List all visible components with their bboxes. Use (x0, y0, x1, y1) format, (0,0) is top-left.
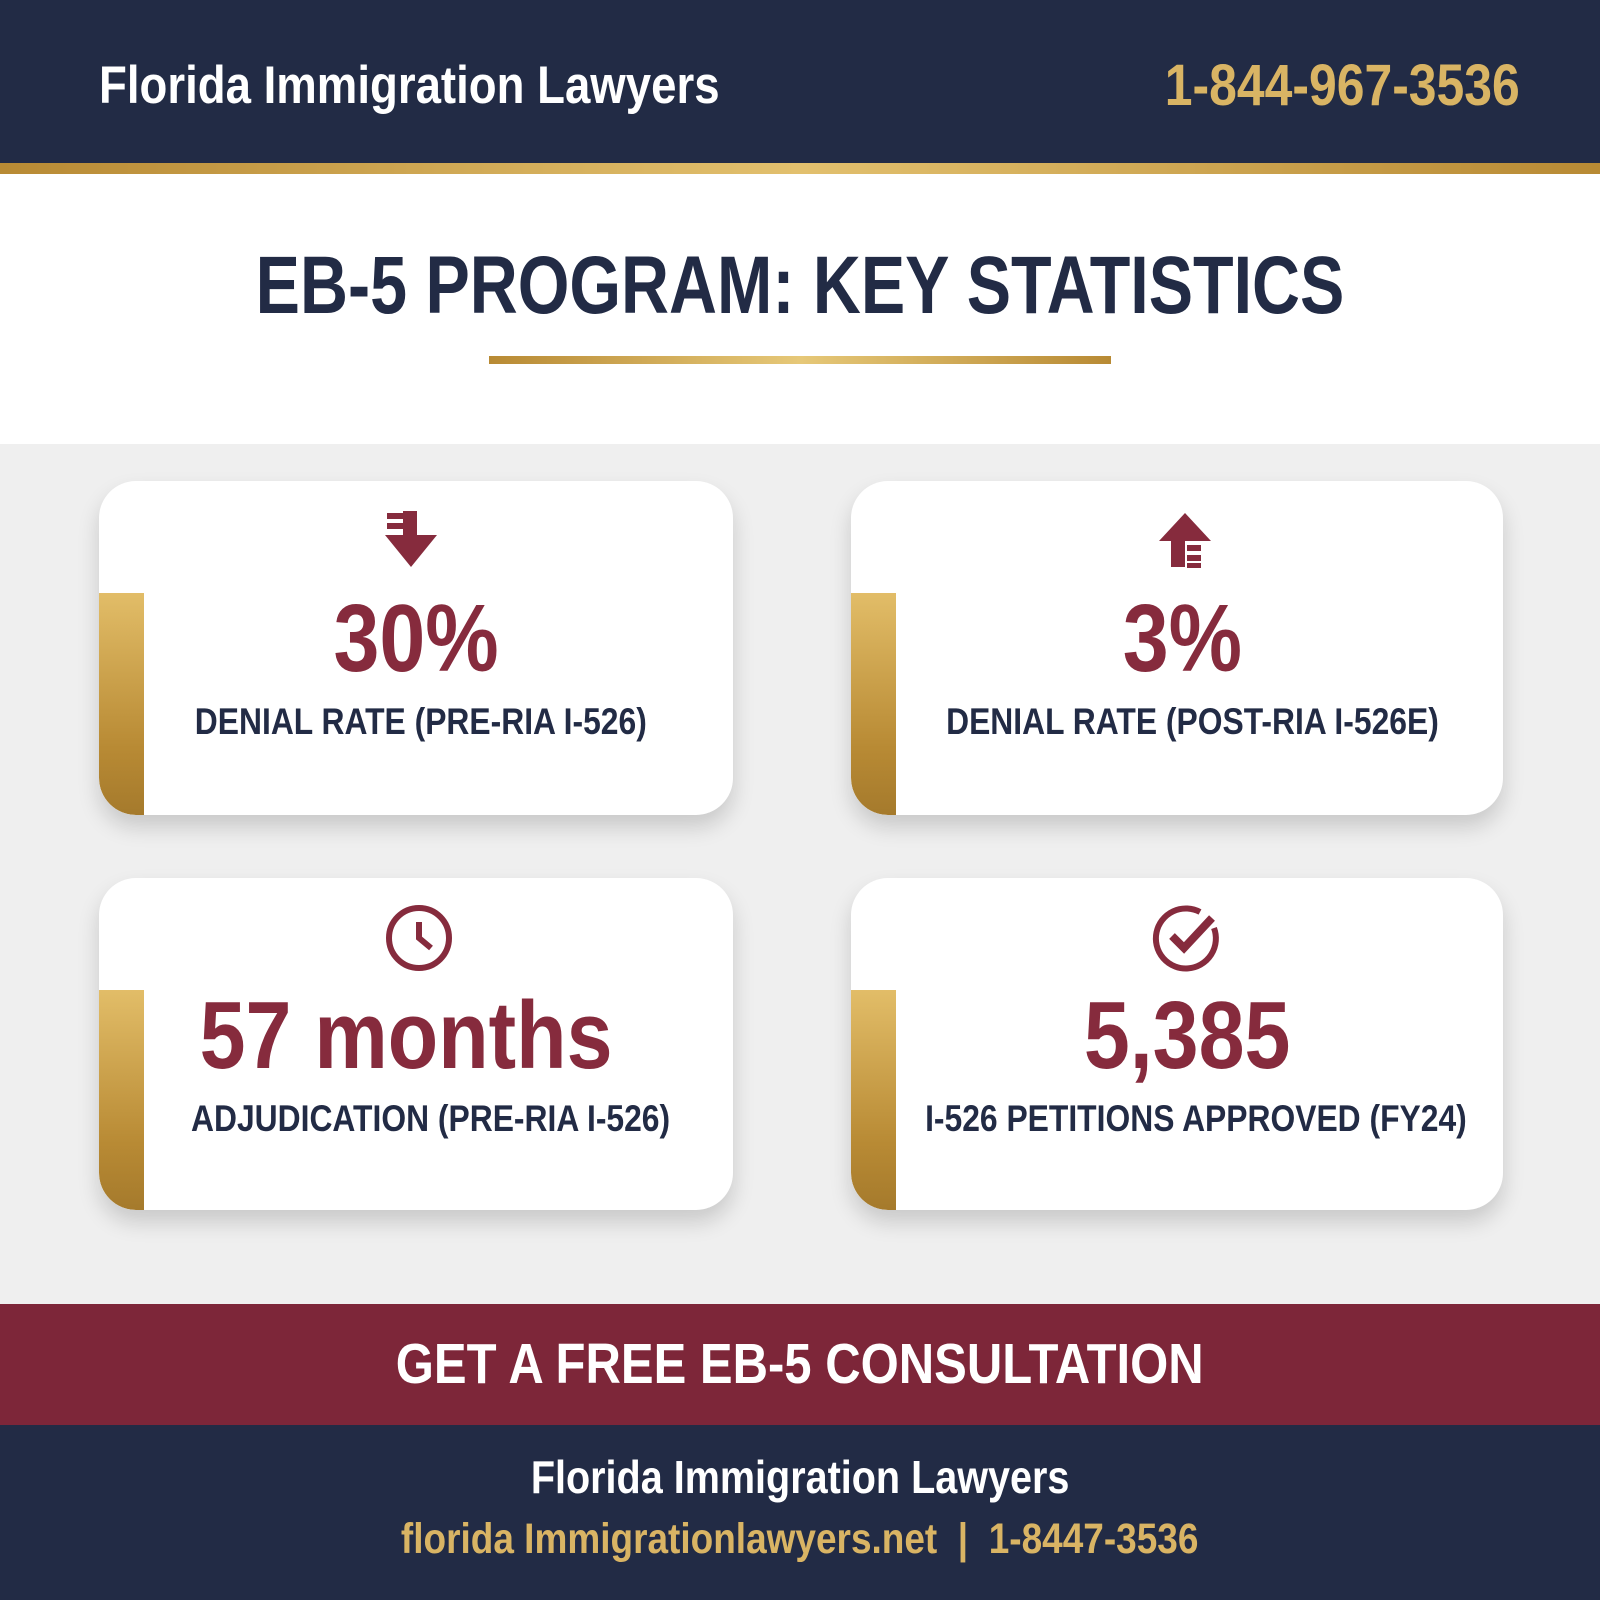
CTA banner (0, 1304, 1600, 1425)
icon: down arrow (385, 511, 437, 567)
title: EB-5 PROGRAM: KEY STATISTICS (256, 240, 1344, 331)
icon: clock (386, 905, 452, 971)
card: 5,385 approved: I-526 PETITIONS APPROVED (FY24) (925, 1098, 1467, 1139)
title underline (489, 356, 1111, 364)
icon: up arrow (1159, 513, 1211, 568)
title section (0, 174, 1600, 444)
footer contact: florida Immigrationlawyers.net | 1-8447-3536 (401, 1515, 1199, 1563)
card: 30% denial (99, 481, 733, 815)
card: 5,385 approved: 5,385 (1084, 982, 1290, 1089)
card: 30% denial: 30% (333, 585, 499, 692)
header firm name: Florida Immigration Lawyers (99, 56, 720, 115)
card: 57 months: ADJUDICATION (PRE-RIA I-526) (191, 1098, 671, 1139)
card: 57 months: 57 months (200, 982, 612, 1089)
header bar (0, 0, 1600, 163)
card: 3% denial: 3% (1122, 585, 1242, 692)
icon: check circle (1152, 906, 1219, 972)
card: 5,385 approved (851, 878, 1503, 1210)
card: 57 months (99, 878, 733, 1210)
card: 3% denial: DENIAL RATE (POST-RIA I-526E) (946, 701, 1438, 742)
card: 30% denial: DENIAL RATE (PRE-RIA I-526) (195, 701, 647, 742)
footer (0, 1425, 1600, 1600)
card: 3% denial (851, 481, 1503, 815)
CTA banner: GET A FREE EB-5 CONSULTATION (396, 1332, 1204, 1396)
footer firm name: Florida Immigration Lawyers (531, 1451, 1069, 1503)
header phone: 1-844-967-3536 (1165, 53, 1520, 118)
